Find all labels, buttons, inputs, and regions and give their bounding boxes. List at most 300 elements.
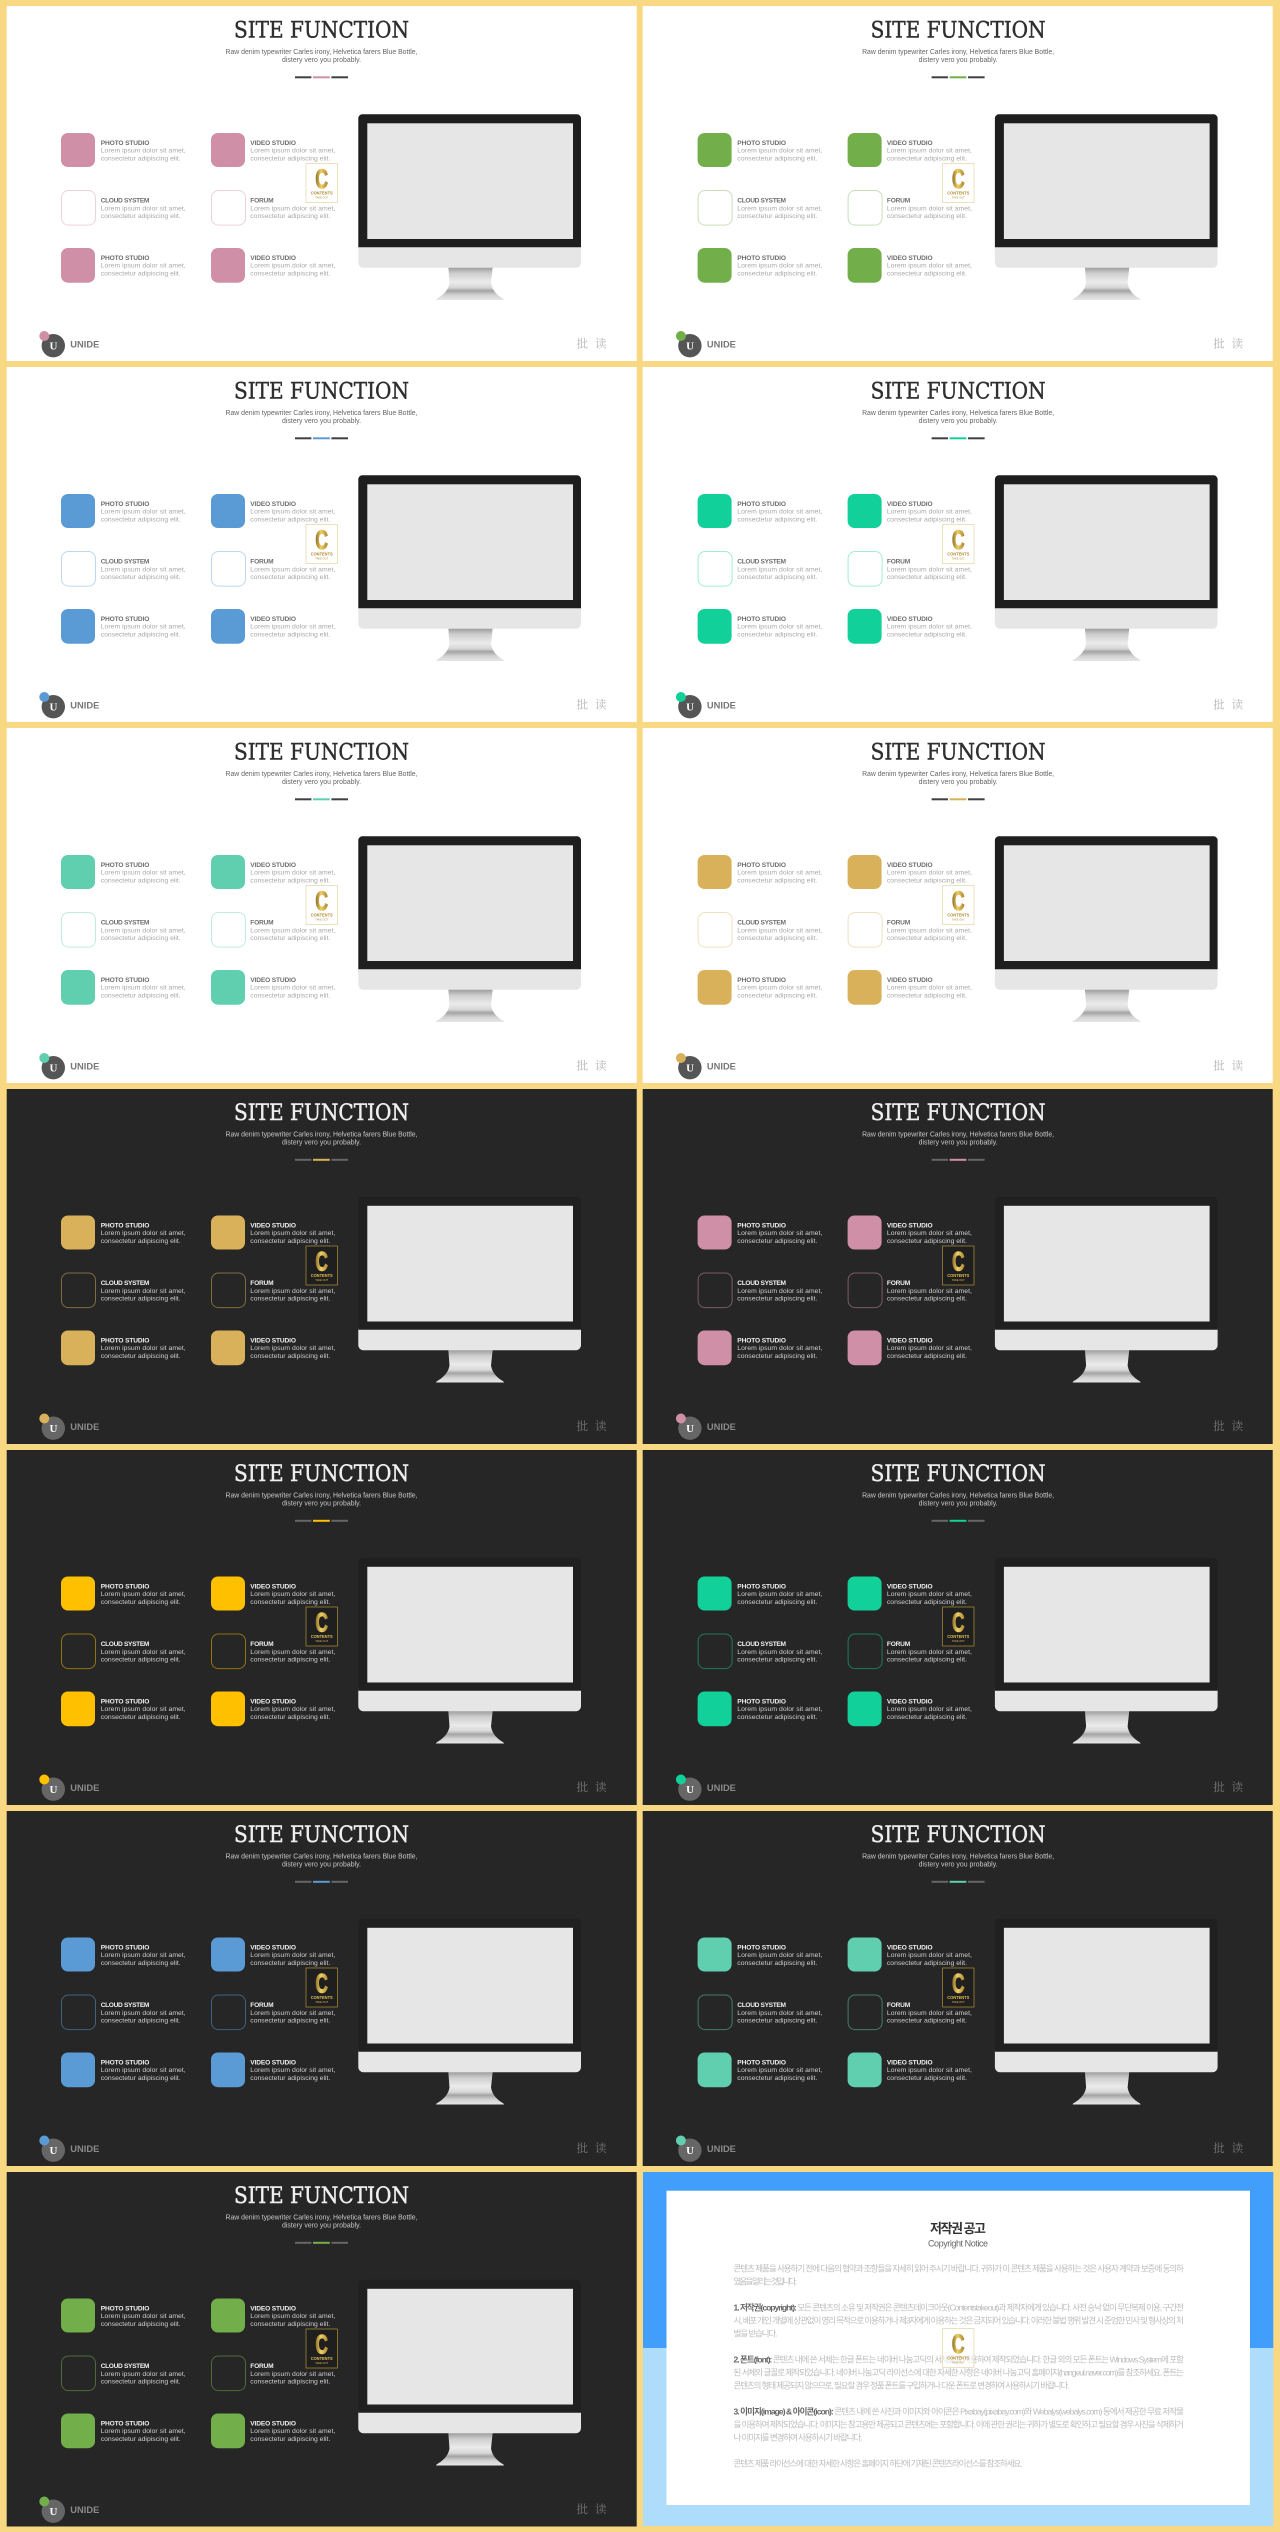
item: video studio bbox=[848, 1330, 972, 1365]
subtitle: distery vero you probably. bbox=[282, 57, 361, 64]
item: photo studio: PHOTO STUDIO bbox=[101, 1338, 149, 1344]
monitor bbox=[358, 114, 581, 300]
item: forum bbox=[212, 190, 335, 225]
item: photo studio: PHOTO STUDIO bbox=[101, 2060, 149, 2066]
subtitle: Raw denim typewriter Carles irony, Helvetica farers Blue Bottle, bbox=[862, 49, 1054, 56]
badge: TAKE OUT bbox=[952, 196, 965, 200]
item: cloud system bbox=[698, 190, 822, 225]
item: photo studio bbox=[698, 609, 822, 644]
badge: C bbox=[952, 1608, 965, 1638]
item: video studio: Lorem ipsum dolor sit amet, bbox=[250, 1345, 335, 1352]
item: forum: FORUM bbox=[250, 2363, 274, 2370]
badge: C bbox=[315, 2330, 328, 2360]
item: forum: consectetur adipiscing elit. bbox=[887, 213, 967, 220]
item: cloud system: Lorem ipsum dolor sit amet, bbox=[101, 2371, 186, 2378]
item: cloud system: consectetur adipiscing elit. bbox=[101, 213, 181, 220]
item: video studio: consectetur adipiscing elit. bbox=[250, 2075, 330, 2082]
item: cloud system: CLOUD SYSTEM bbox=[101, 1641, 150, 1648]
logo: U bbox=[50, 2145, 58, 2157]
subtitle: Raw denim typewriter Carles irony, Helvetica farers Blue Bottle, bbox=[862, 410, 1054, 417]
item: video studio: Lorem ipsum dolor sit amet, bbox=[887, 985, 972, 992]
notice: font: 콘텐츠의 형태 제공되지 않으므로, 필요할 경우 정품 폰트를 구입하거나 다운 폰트로 변경하여 사용하시기 바랍니다. bbox=[734, 2381, 1070, 2391]
item: cloud system: CLOUD SYSTEM bbox=[101, 1280, 150, 1287]
item: video studio: VIDEO STUDIO bbox=[887, 616, 933, 623]
title: SITE FUNCTION bbox=[234, 1822, 409, 1848]
item: photo studio bbox=[698, 2052, 822, 2087]
item: photo studio: Lorem ipsum dolor sit amet, bbox=[737, 1706, 822, 1713]
logo: U bbox=[50, 1423, 58, 1435]
item: video studio: Lorem ipsum dolor sit amet, bbox=[250, 263, 335, 270]
item: forum: consectetur adipiscing elit. bbox=[887, 935, 967, 942]
notice: image and icon bbox=[734, 2406, 1184, 2443]
item: cloud system bbox=[62, 190, 186, 225]
item: cloud system bbox=[62, 552, 186, 586]
item: video studio: Lorem ipsum dolor sit amet, bbox=[887, 148, 972, 155]
item: photo studio: consectetur adipiscing elit. bbox=[101, 1714, 181, 1721]
item: video studio: consectetur adipiscing elit. bbox=[250, 1960, 330, 1967]
item: video studio: consectetur adipiscing elit. bbox=[250, 877, 330, 884]
item: video studio: VIDEO STUDIO bbox=[887, 1698, 933, 1706]
badge: C bbox=[315, 1968, 328, 1998]
notice intro bbox=[734, 2264, 1184, 2287]
item: video studio: Lorem ipsum dolor sit amet, bbox=[250, 985, 335, 992]
title: SITE FUNCTION bbox=[234, 2183, 409, 2209]
monitor bbox=[995, 1197, 1218, 1382]
badge: TAKE OUT bbox=[315, 1639, 329, 1643]
item: forum: FORUM bbox=[887, 2002, 911, 2009]
side text: 批 读 bbox=[1213, 1058, 1244, 1074]
item: video studio: VIDEO STUDIO bbox=[887, 1944, 933, 1952]
item: forum: Lorem ipsum dolor sit amet, bbox=[250, 1288, 335, 1295]
item: video studio bbox=[211, 1938, 335, 1972]
subtitle: Raw denim typewriter Carles irony, Helvetica farers Blue Bottle, bbox=[862, 771, 1054, 778]
item: video studio: Lorem ipsum dolor sit amet, bbox=[250, 1591, 335, 1598]
divider bbox=[932, 76, 985, 78]
item: photo studio: PHOTO STUDIO bbox=[737, 862, 786, 869]
item: photo studio: Lorem ipsum dolor sit amet, bbox=[737, 1230, 822, 1237]
logo: UNIDE bbox=[707, 339, 736, 350]
item: cloud system: Lorem ipsum dolor sit amet, bbox=[737, 927, 822, 934]
panel: slide dark green bbox=[7, 2172, 637, 2526]
badge: CONTENTS bbox=[947, 552, 969, 556]
item: video studio bbox=[848, 248, 972, 283]
monitor bbox=[358, 2280, 581, 2466]
item: photo studio bbox=[698, 1692, 822, 1726]
item: video studio: VIDEO STUDIO bbox=[887, 1584, 933, 1590]
item: forum bbox=[848, 912, 972, 947]
item: forum: consectetur adipiscing elit. bbox=[250, 574, 330, 581]
badge: CONTENTS bbox=[947, 912, 969, 918]
item: photo studio: consectetur adipiscing elit. bbox=[101, 155, 181, 162]
item: photo studio bbox=[61, 248, 186, 283]
panel: slide dark gold bbox=[7, 1089, 637, 1444]
item: photo studio: Lorem ipsum dolor sit amet, bbox=[737, 263, 822, 270]
item: photo studio bbox=[61, 2052, 186, 2087]
item: forum: FORUM bbox=[250, 1641, 274, 1648]
item: video studio bbox=[211, 133, 335, 167]
subtitle bbox=[226, 1854, 418, 1868]
logo: U bbox=[686, 1062, 694, 1074]
item: forum: Lorem ipsum dolor sit amet, bbox=[250, 927, 335, 934]
notice: copyright: 1. 저작권(copyright): 모든 콘텐츠의 소유 및 저작권은 콘텐츠테이크아웃(Contentstakeout)과 제작자에게 있습니다. 사전 승낙 없이 무단복제 이용, 구간전 bbox=[734, 2302, 1184, 2312]
item: photo studio: PHOTO STUDIO bbox=[737, 1222, 786, 1230]
logo bbox=[39, 1774, 99, 1801]
item: cloud system: CLOUD SYSTEM bbox=[737, 1280, 786, 1287]
item: video studio bbox=[211, 248, 335, 283]
logo bbox=[39, 692, 99, 718]
item: cloud system bbox=[62, 1634, 186, 1669]
divider bbox=[932, 437, 985, 439]
logo: U bbox=[50, 1784, 58, 1796]
item: forum: FORUM bbox=[250, 558, 274, 565]
item: cloud system: CLOUD SYSTEM bbox=[737, 2002, 786, 2009]
subtitle: distery vero you probably. bbox=[282, 1140, 361, 1146]
badge bbox=[306, 524, 337, 564]
item: photo studio: consectetur adipiscing elit. bbox=[737, 1960, 817, 1967]
subtitle: distery vero you probably. bbox=[282, 1500, 361, 1508]
item: photo studio: consectetur adipiscing elit. bbox=[737, 1714, 817, 1721]
side text: 批 读 bbox=[1213, 1418, 1244, 1434]
notice: copyright: 벌을 받습니다. bbox=[734, 2328, 778, 2338]
side text: 批 读 bbox=[1213, 336, 1244, 352]
item: forum: FORUM bbox=[250, 919, 274, 926]
badge: TAKE OUT bbox=[315, 556, 329, 560]
subtitle bbox=[862, 1132, 1054, 1146]
item: video studio: consectetur adipiscing elit. bbox=[887, 2075, 967, 2082]
badge: CONTENTS bbox=[947, 1634, 969, 1639]
notice: closing line: 콘텐츠 제품 라이선스에 대한 자세한 사항은 홈페이지 하단에 기재된 콘텐츠라이선스를 참조하세요. bbox=[734, 2459, 1022, 2469]
item: forum: Lorem ipsum dolor sit amet, bbox=[887, 205, 972, 212]
item: cloud system: Lorem ipsum dolor sit amet, bbox=[101, 566, 186, 573]
item: cloud system: consectetur adipiscing elit. bbox=[101, 935, 181, 942]
logo bbox=[676, 331, 736, 357]
item: video studio bbox=[848, 970, 972, 1005]
item: photo studio: Lorem ipsum dolor sit amet, bbox=[101, 1345, 186, 1352]
badge: CONTENTS bbox=[947, 2356, 969, 2360]
badge: C bbox=[315, 164, 328, 194]
item: cloud system: consectetur adipiscing elit. bbox=[101, 2018, 181, 2024]
monitor bbox=[995, 1558, 1218, 1744]
item: video studio: VIDEO STUDIO bbox=[250, 862, 296, 869]
subtitle: Raw denim typewriter Carles irony, Helvetica farers Blue Bottle, bbox=[862, 1492, 1054, 1500]
item: forum: Lorem ipsum dolor sit amet, bbox=[887, 566, 972, 573]
item: photo studio: consectetur adipiscing elit. bbox=[737, 516, 817, 523]
logo bbox=[676, 692, 736, 718]
item: video studio bbox=[211, 970, 335, 1005]
subtitle: distery vero you probably. bbox=[282, 418, 361, 425]
badge: CONTENTS bbox=[947, 1273, 969, 1278]
item: video studio: Lorem ipsum dolor sit amet, bbox=[250, 2067, 335, 2074]
badge bbox=[943, 1246, 974, 1285]
item: video studio bbox=[848, 855, 972, 889]
subtitle: Raw denim typewriter Carles irony, Helvetica farers Blue Bottle, bbox=[862, 1132, 1054, 1138]
item: video studio bbox=[211, 1692, 335, 1726]
item: photo studio: consectetur adipiscing elit. bbox=[101, 2075, 181, 2082]
logo bbox=[39, 1414, 99, 1440]
item: cloud system: Lorem ipsum dolor sit amet, bbox=[737, 2010, 822, 2017]
divider bbox=[295, 76, 348, 78]
item: photo studio: Lorem ipsum dolor sit amet, bbox=[101, 509, 186, 516]
item: photo studio: Lorem ipsum dolor sit amet, bbox=[737, 1952, 822, 1959]
badge: TAKE OUT bbox=[315, 1278, 329, 1282]
badge bbox=[942, 2328, 974, 2368]
badge: C bbox=[952, 164, 965, 194]
item: video studio: consectetur adipiscing elit. bbox=[887, 1353, 967, 1360]
item: photo studio: PHOTO STUDIO bbox=[101, 1584, 149, 1590]
item: cloud system bbox=[698, 912, 822, 947]
side text: 批 读 bbox=[576, 696, 607, 712]
item: photo studio: Lorem ipsum dolor sit amet, bbox=[737, 148, 822, 155]
item: photo studio: PHOTO STUDIO bbox=[101, 616, 149, 623]
item: cloud system: consectetur adipiscing elit. bbox=[101, 2378, 181, 2386]
item: photo studio: consectetur adipiscing elit. bbox=[737, 993, 817, 1000]
item: photo studio bbox=[698, 970, 822, 1005]
item: cloud system: consectetur adipiscing elit. bbox=[737, 2018, 817, 2024]
item: video studio: consectetur adipiscing elit. bbox=[887, 1960, 967, 1967]
subtitle: Raw denim typewriter Carles irony, Helvetica farers Blue Bottle, bbox=[226, 49, 418, 56]
item: video studio bbox=[211, 855, 335, 889]
item: forum bbox=[212, 552, 335, 586]
item: photo studio: PHOTO STUDIO bbox=[737, 140, 786, 147]
item: photo studio: consectetur adipiscing elit. bbox=[101, 1960, 181, 1967]
badge: C bbox=[952, 1246, 965, 1276]
badge: CONTENTS bbox=[311, 912, 333, 918]
badge: TAKE OUT bbox=[952, 1278, 965, 1282]
logo: UNIDE bbox=[707, 1061, 736, 1072]
notice: image and icon: 나 이미지를 변경하여 사용하시기 바랍니다. bbox=[734, 2433, 862, 2443]
badge: C bbox=[952, 2329, 965, 2359]
badge: TAKE OUT bbox=[315, 2361, 329, 2365]
item: cloud system: CLOUD SYSTEM bbox=[737, 1641, 786, 1648]
item: cloud system: consectetur adipiscing elit. bbox=[101, 1296, 181, 1302]
item: photo studio: consectetur adipiscing elit. bbox=[737, 1238, 817, 1245]
item: video studio: consectetur adipiscing elit. bbox=[250, 1238, 330, 1245]
monitor bbox=[358, 836, 581, 1022]
item: photo studio: Lorem ipsum dolor sit amet, bbox=[737, 509, 822, 516]
side text: 批 读 bbox=[576, 2501, 607, 2517]
item: cloud system: consectetur adipiscing elit. bbox=[101, 1656, 181, 1664]
item: photo studio: PHOTO STUDIO bbox=[101, 977, 149, 984]
badge bbox=[943, 164, 974, 202]
item: cloud system: consectetur adipiscing elit. bbox=[737, 574, 817, 581]
divider bbox=[295, 1881, 348, 1883]
item: photo studio: Lorem ipsum dolor sit amet, bbox=[101, 1591, 186, 1598]
logo: UNIDE bbox=[70, 2144, 99, 2155]
item: forum: FORUM bbox=[887, 1641, 911, 1648]
item: photo studio bbox=[698, 1938, 822, 1972]
item: video studio: consectetur adipiscing elit. bbox=[887, 155, 967, 162]
item: photo studio: Lorem ipsum dolor sit amet, bbox=[737, 1591, 822, 1598]
subtitle bbox=[226, 49, 418, 64]
item: forum: consectetur adipiscing elit. bbox=[250, 2018, 330, 2024]
badge: TAKE OUT bbox=[315, 918, 329, 922]
item: photo studio bbox=[698, 1576, 822, 1610]
item: video studio bbox=[211, 609, 335, 644]
item: photo studio bbox=[61, 494, 186, 528]
item: forum: consectetur adipiscing elit. bbox=[887, 2018, 967, 2024]
monitor bbox=[358, 1197, 581, 1382]
logo bbox=[676, 1053, 736, 1079]
logo: U bbox=[686, 2145, 694, 2157]
subtitle: distery vero you probably. bbox=[919, 1140, 998, 1146]
item: video studio: consectetur adipiscing elit. bbox=[250, 1353, 330, 1360]
panel: slide dark emerald bbox=[643, 1450, 1273, 1805]
item: forum: consectetur adipiscing elit. bbox=[250, 935, 330, 942]
logo bbox=[676, 1414, 736, 1440]
item: cloud system: CLOUD SYSTEM bbox=[101, 197, 150, 204]
item: video studio: Lorem ipsum dolor sit amet, bbox=[887, 870, 972, 877]
item: photo studio: Lorem ipsum dolor sit amet, bbox=[737, 624, 822, 631]
item: video studio: Lorem ipsum dolor sit amet, bbox=[250, 148, 335, 155]
logo bbox=[676, 2136, 736, 2162]
badge bbox=[306, 2329, 337, 2368]
badge: TAKE OUT bbox=[952, 2000, 965, 2004]
panel: slide light pink bbox=[7, 6, 637, 361]
title: SITE FUNCTION bbox=[234, 1461, 409, 1487]
subtitle bbox=[226, 410, 418, 425]
item: cloud system: consectetur adipiscing elit. bbox=[737, 213, 817, 220]
notice: font: 된 서체와 글꼴로 제작되었습니다. 네이버 나눔고딕 라이선스에 대한 자세한 사항은 네이버 나눔고딕 홈페이지(hangeul.naver.com)를 참조하세요. 폰트는 bbox=[734, 2368, 1184, 2378]
subtitle: distery vero you probably. bbox=[282, 1862, 361, 1868]
item: forum: Lorem ipsum dolor sit amet, bbox=[887, 1288, 972, 1295]
item: forum: consectetur adipiscing elit. bbox=[250, 213, 330, 220]
item: cloud system bbox=[698, 1995, 822, 2030]
item: photo studio: Lorem ipsum dolor sit amet, bbox=[737, 2067, 822, 2074]
item: photo studio: PHOTO STUDIO bbox=[737, 1944, 786, 1952]
item: video studio: VIDEO STUDIO bbox=[250, 2060, 296, 2066]
monitor bbox=[358, 1558, 581, 1744]
subtitle: Raw denim typewriter Carles irony, Helvetica farers Blue Bottle, bbox=[862, 1854, 1054, 1860]
item: photo studio bbox=[61, 2298, 186, 2332]
item: forum: consectetur adipiscing elit. bbox=[250, 1656, 330, 1664]
item: video studio bbox=[211, 494, 335, 528]
item: photo studio: Lorem ipsum dolor sit amet, bbox=[101, 870, 186, 877]
badge: TAKE OUT bbox=[952, 2360, 965, 2364]
side text: 批 读 bbox=[1213, 1779, 1244, 1795]
item: video studio: Lorem ipsum dolor sit amet, bbox=[887, 1706, 972, 1713]
item: photo studio: PHOTO STUDIO bbox=[737, 977, 786, 984]
item: forum bbox=[848, 1995, 972, 2030]
item: photo studio: consectetur adipiscing elit. bbox=[101, 271, 181, 278]
item: photo studio: consectetur adipiscing elit. bbox=[101, 516, 181, 523]
item: photo studio bbox=[698, 248, 822, 283]
panel: slide dark pink bbox=[643, 1089, 1273, 1444]
item: video studio bbox=[211, 2298, 335, 2332]
item: video studio: Lorem ipsum dolor sit amet, bbox=[250, 624, 335, 631]
logo bbox=[39, 1053, 99, 1079]
item: video studio: consectetur adipiscing elit. bbox=[887, 516, 967, 523]
divider bbox=[932, 1159, 985, 1161]
item: photo studio: PHOTO STUDIO bbox=[737, 1338, 786, 1344]
logo: UNIDE bbox=[707, 2144, 736, 2155]
item: video studio: Lorem ipsum dolor sit amet, bbox=[887, 263, 972, 270]
badge: C bbox=[952, 1968, 965, 1998]
side text: 批 读 bbox=[576, 2140, 607, 2156]
item: forum: Lorem ipsum dolor sit amet, bbox=[250, 1649, 335, 1656]
subtitle: distery vero you probably. bbox=[282, 779, 361, 786]
item: photo studio: Lorem ipsum dolor sit amet, bbox=[101, 985, 186, 992]
subtitle bbox=[862, 49, 1054, 64]
item: photo studio: PHOTO STUDIO bbox=[101, 255, 149, 262]
monitor bbox=[995, 836, 1218, 1022]
panel: slide dark mint bbox=[643, 1811, 1273, 2166]
item: photo studio: PHOTO STUDIO bbox=[737, 616, 786, 623]
notice: image and icon: 을 이용하여 제작되었습니다. 이미지는 참고용만 제공되고 콘텐츠에는 포함합니다. 이에 관한 권리는 귀하가 별도로 확인하고 필요할 경우 사진을 삭제하거 bbox=[734, 2419, 1184, 2429]
divider bbox=[295, 2242, 348, 2244]
logo bbox=[39, 331, 99, 357]
monitor bbox=[995, 475, 1218, 661]
item: photo studio: Lorem ipsum dolor sit amet, bbox=[101, 263, 186, 270]
item: photo studio: PHOTO STUDIO bbox=[101, 501, 149, 508]
subtitle bbox=[862, 1492, 1054, 1508]
item: photo studio: consectetur adipiscing elit. bbox=[101, 877, 181, 884]
item: video studio: consectetur adipiscing elit. bbox=[250, 516, 330, 523]
item: video studio: Lorem ipsum dolor sit amet, bbox=[887, 1230, 972, 1237]
subtitle bbox=[862, 1854, 1054, 1868]
badge: C bbox=[315, 1608, 328, 1638]
badge: CONTENTS bbox=[311, 1995, 333, 2000]
item: photo studio: Lorem ipsum dolor sit amet, bbox=[101, 148, 186, 155]
item: cloud system: Lorem ipsum dolor sit amet, bbox=[101, 927, 186, 934]
item: cloud system: consectetur adipiscing elit. bbox=[737, 1296, 817, 1302]
item: photo studio: consectetur adipiscing elit. bbox=[737, 1599, 817, 1606]
item: photo studio: PHOTO STUDIO bbox=[737, 501, 786, 508]
badge bbox=[943, 1607, 974, 1646]
item: photo studio bbox=[61, 133, 186, 167]
item: photo studio: Lorem ipsum dolor sit amet, bbox=[101, 2428, 186, 2435]
item: video studio: VIDEO STUDIO bbox=[887, 862, 933, 869]
logo: U bbox=[686, 1784, 694, 1796]
item: forum: Lorem ipsum dolor sit amet, bbox=[887, 1649, 972, 1656]
item: video studio: Lorem ipsum dolor sit amet, bbox=[887, 1591, 972, 1598]
item: video studio: consectetur adipiscing elit. bbox=[887, 1599, 967, 1606]
title: SITE FUNCTION bbox=[871, 739, 1046, 765]
item: forum: Lorem ipsum dolor sit amet, bbox=[250, 2371, 335, 2378]
item: video studio bbox=[848, 1692, 972, 1726]
item: photo studio: Lorem ipsum dolor sit amet, bbox=[101, 2067, 186, 2074]
item: video studio: VIDEO STUDIO bbox=[887, 1222, 933, 1230]
badge bbox=[943, 1968, 974, 2007]
subtitle: distery vero you probably. bbox=[919, 1862, 998, 1868]
item: cloud system: CLOUD SYSTEM bbox=[737, 558, 786, 565]
item: video studio bbox=[848, 1938, 972, 1972]
title: SITE FUNCTION bbox=[871, 1100, 1046, 1126]
item: cloud system: CLOUD SYSTEM bbox=[101, 2363, 150, 2370]
item: cloud system: Lorem ipsum dolor sit amet, bbox=[101, 1288, 186, 1295]
divider bbox=[295, 1520, 348, 1522]
subtitle: distery vero you probably. bbox=[919, 1500, 998, 1508]
item: forum: FORUM bbox=[887, 1280, 911, 1287]
item: photo studio: consectetur adipiscing elit. bbox=[737, 1353, 817, 1360]
notice: copyright bbox=[734, 2302, 1184, 2338]
item: photo studio: PHOTO STUDIO bbox=[737, 1584, 786, 1590]
badge: TAKE OUT bbox=[315, 2000, 329, 2004]
item: photo studio: consectetur adipiscing elit. bbox=[101, 1238, 181, 1245]
item: video studio: VIDEO STUDIO bbox=[887, 1338, 933, 1344]
badge: CONTENTS bbox=[311, 1634, 333, 1639]
item: cloud system: CLOUD SYSTEM bbox=[101, 2002, 150, 2009]
item: cloud system: consectetur adipiscing elit. bbox=[737, 935, 817, 942]
item: video studio: consectetur adipiscing elit. bbox=[250, 2436, 330, 2443]
logo: UNIDE bbox=[70, 339, 99, 350]
item: video studio: Lorem ipsum dolor sit amet, bbox=[887, 2067, 972, 2074]
badge: TAKE OUT bbox=[952, 918, 965, 922]
notice: font bbox=[734, 2355, 1184, 2391]
item: video studio: VIDEO STUDIO bbox=[250, 1222, 296, 1230]
title: SITE FUNCTION bbox=[234, 1100, 409, 1126]
item: photo studio: PHOTO STUDIO bbox=[101, 1698, 149, 1706]
item: forum bbox=[212, 1995, 335, 2030]
